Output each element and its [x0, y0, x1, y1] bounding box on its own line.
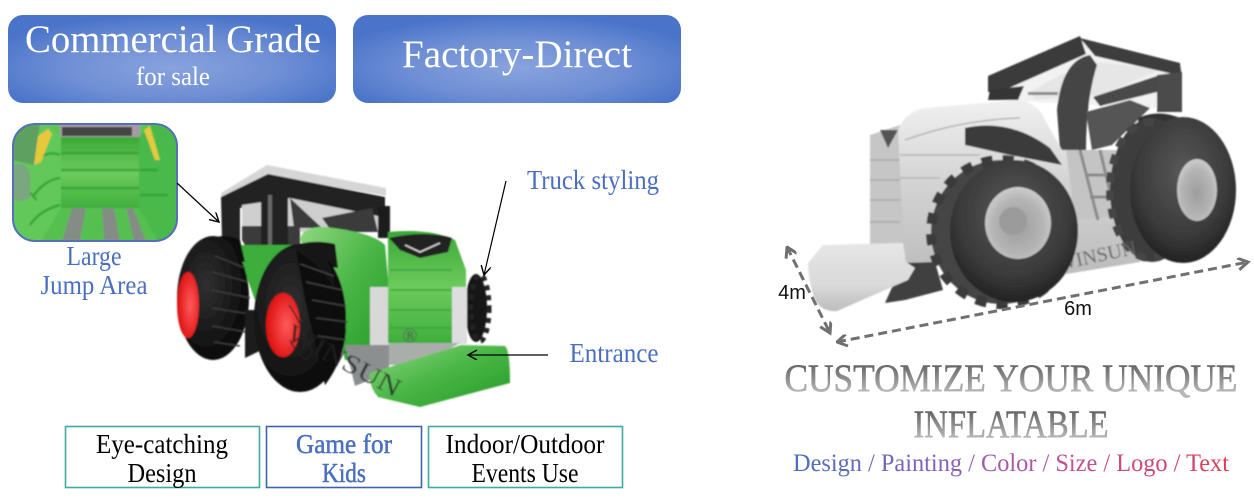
feature box: Indoor/Outdoor Events Use: Indoor/Outdoor	[446, 429, 604, 459]
inset photo: large jump area	[13, 124, 177, 241]
feature box: Game for Kids: Game for	[296, 429, 392, 459]
width dimension arrow	[837, 262, 1248, 342]
button: Commercial Grade for sale: for sale	[136, 62, 210, 91]
front tire	[931, 126, 1078, 304]
label: 6m: 6m	[1064, 298, 1092, 320]
logo: registered mark: ®	[402, 325, 418, 347]
arrow: jump area	[177, 183, 219, 222]
feature box: Eye-catching Design: Design	[128, 458, 197, 488]
label: Truck styling: Truck styling	[527, 165, 659, 195]
feature box: Eye-catching Design	[66, 426, 260, 488]
options line: Design / Painting / Color / Size / Logo / Text	[793, 450, 1229, 477]
logo: WINSUN: WINSUN	[282, 318, 406, 403]
cab frame	[988, 36, 1182, 150]
label: Large Jump Area	[40, 241, 148, 300]
logo: WINSUN: WINSUN	[1055, 237, 1138, 275]
feature box: Indoor/Outdoor Events Use: Events Use	[472, 458, 579, 488]
heading: customize your unique inflatable	[784, 357, 1238, 446]
cab roof	[221, 165, 390, 268]
right photo: grayscale tractor inflatable	[808, 36, 1236, 311]
feature box: Indoor/Outdoor Events Use	[428, 426, 622, 488]
front tire	[254, 242, 348, 392]
left photo: green tractor inflatable	[177, 165, 510, 407]
entrance step	[370, 345, 510, 407]
button: Factory-Direct	[353, 15, 681, 103]
label: Entrance: Entrance	[570, 338, 659, 368]
label: Large Jump Area: Jump Area	[40, 270, 148, 300]
feature box: Game for Kids	[266, 426, 422, 488]
label: 4m: 4m	[778, 282, 806, 304]
arrow: truck styling	[484, 181, 506, 275]
button: Commercial Grade for sale	[8, 15, 336, 103]
depth dimension arrow	[787, 247, 830, 333]
back left tire	[177, 236, 272, 360]
arrow: entrance	[468, 354, 548, 356]
button: Factory-Direct: Factory-Direct	[402, 33, 632, 76]
green body	[235, 227, 467, 386]
rear right tire	[465, 274, 489, 342]
button: Commercial Grade for sale: Commercial Grade	[25, 18, 321, 61]
right tire	[1110, 113, 1236, 263]
feature box: Game for Kids: Kids	[322, 458, 366, 488]
label: Large Jump Area: Large	[66, 241, 122, 271]
feature box: Eye-catching Design: Eye-catching	[96, 429, 228, 459]
entrance step	[808, 243, 943, 311]
heading: customize your unique inflatable: INFLATABLE	[914, 403, 1108, 446]
inflatable body	[870, 100, 1140, 275]
